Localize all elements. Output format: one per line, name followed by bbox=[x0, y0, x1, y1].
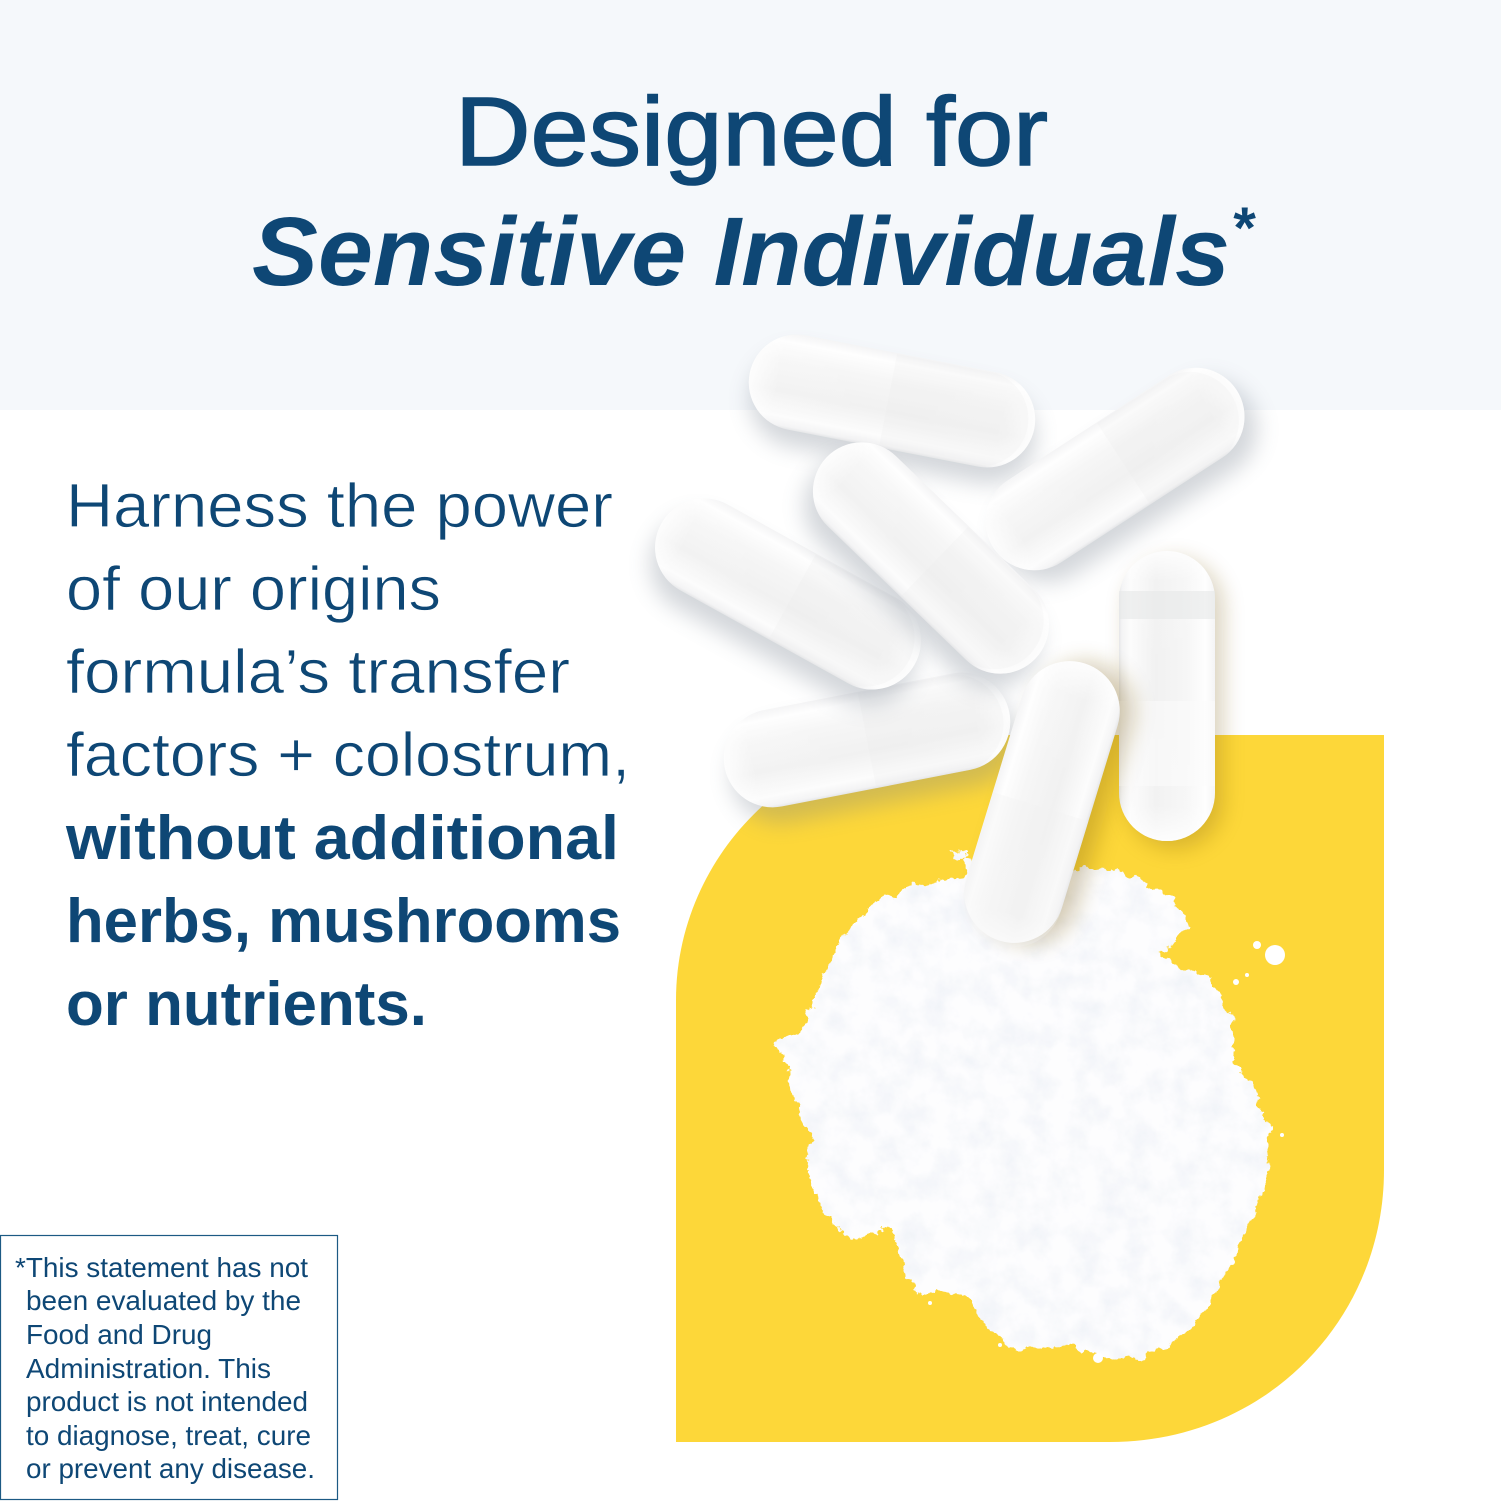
body text: without additional bbox=[65, 804, 619, 873]
body text bbox=[65, 472, 630, 1039]
capsule: vertical right bbox=[1119, 551, 1223, 849]
capsule: top bbox=[737, 326, 1047, 492]
top background band bbox=[0, 0, 1501, 410]
title: Designed for bbox=[455, 77, 1048, 186]
disclaimer box bbox=[0, 1236, 338, 1500]
disclaimer box: Food and Drug bbox=[26, 1319, 212, 1350]
powder pile bbox=[772, 850, 1285, 1363]
body text: formula’s transfer bbox=[66, 638, 570, 707]
body text: of our origins bbox=[66, 555, 441, 624]
capsule: centre bbox=[781, 422, 1072, 709]
title bbox=[252, 77, 1256, 306]
disclaimer box: Administration. This bbox=[26, 1353, 271, 1384]
yellow shape panel bbox=[676, 735, 1384, 1442]
disclaimer box: product is not intended bbox=[26, 1386, 308, 1417]
disclaimer box: *This statement has not bbox=[15, 1252, 308, 1283]
capsule: left bbox=[629, 481, 942, 724]
disclaimer box: been evaluated by the bbox=[26, 1285, 301, 1316]
body text: factors + colostrum, bbox=[66, 721, 630, 790]
capsule: top right bbox=[967, 347, 1276, 603]
disclaimer box: to diagnose, treat, cure bbox=[26, 1420, 311, 1451]
title: * bbox=[1231, 196, 1256, 261]
disclaimer box: or prevent any disease. bbox=[26, 1453, 315, 1484]
body text: Harness the power bbox=[66, 472, 613, 541]
body text: or nutrients. bbox=[66, 970, 427, 1039]
title: Sensitive Individuals bbox=[252, 197, 1230, 306]
capsule: lower left bbox=[715, 663, 1026, 832]
capsule: front bbox=[950, 645, 1147, 964]
powder specks bbox=[928, 941, 1285, 1363]
body text: herbs, mushrooms bbox=[66, 887, 621, 956]
capsules group bbox=[629, 326, 1276, 964]
